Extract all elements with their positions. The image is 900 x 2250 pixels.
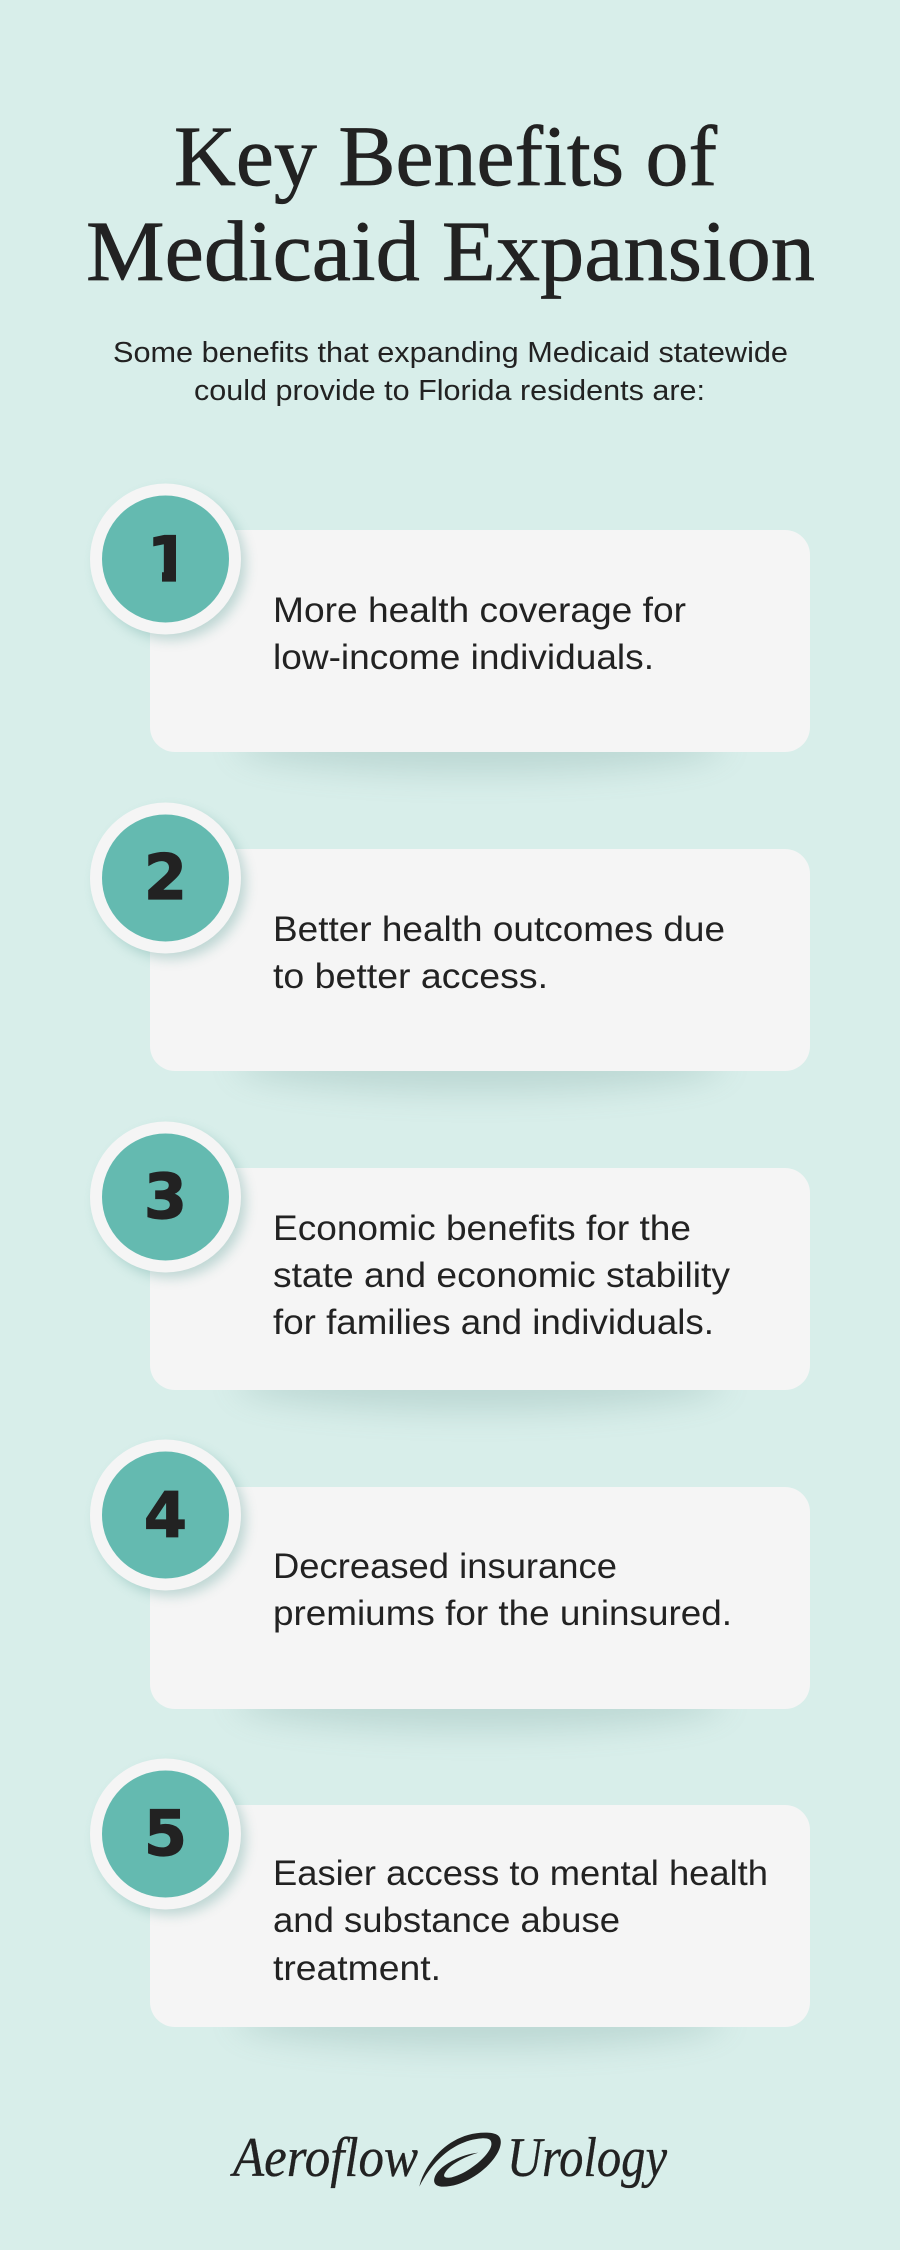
text: benefit 3: state and economic stability bbox=[273, 1255, 730, 1295]
text: benefit 2 bbox=[273, 909, 725, 996]
subtitle: could provide to Florida residents are: bbox=[194, 375, 705, 407]
text: benefit 4: Decreased insurance bbox=[273, 1546, 617, 1586]
text: benefit 5 bbox=[273, 1853, 768, 1988]
subtitle: Some benefits that expanding Medicaid statewide bbox=[113, 337, 788, 369]
panel: benefit 5 bbox=[90, 1758, 810, 2048]
title: Key Benefits of bbox=[174, 108, 717, 204]
text: benefit 2: Better health outcomes due bbox=[273, 909, 725, 949]
text: benefit 3: Economic benefits for the bbox=[273, 1208, 691, 1248]
title bbox=[86, 108, 815, 299]
text: benefit 3 bbox=[273, 1208, 730, 1342]
text: benefit 1 bbox=[273, 590, 686, 677]
panel: benefit 2 bbox=[90, 802, 810, 1092]
text: benefit 5: and substance abuse bbox=[273, 1900, 620, 1940]
number 3: 3 bbox=[144, 1160, 187, 1233]
subtitle bbox=[113, 337, 788, 407]
logo: Aeroflow Urology bbox=[229, 2127, 667, 2189]
text: benefit 5: treatment. bbox=[273, 1948, 441, 1988]
text: benefit 3: for families and individuals. bbox=[273, 1302, 714, 1342]
number 4: 4 bbox=[144, 1479, 187, 1552]
text: benefit 4: premiums for the uninsured. bbox=[273, 1593, 732, 1633]
logo: Aeroflow Urology: Urology bbox=[507, 2127, 667, 2189]
icon: swirl bbox=[419, 2133, 501, 2187]
number 2: 2 bbox=[144, 841, 187, 914]
panel: benefit 1 bbox=[90, 484, 810, 773]
text: benefit 5: Easier access to mental health bbox=[273, 1853, 768, 1893]
text: benefit 4 bbox=[273, 1546, 732, 1633]
text: benefit 1: More health coverage for bbox=[273, 590, 686, 630]
number 5: 5 bbox=[144, 1797, 187, 1870]
title: Medicaid Expansion bbox=[86, 203, 815, 299]
text: benefit 2: to better access. bbox=[273, 956, 548, 996]
panel: benefit 4 bbox=[90, 1440, 810, 1730]
logo: Aeroflow Urology: Aeroflow bbox=[229, 2127, 418, 2189]
number 1: 1 bbox=[147, 523, 190, 596]
panel: benefit 3 bbox=[90, 1122, 810, 1411]
text: benefit 1: low-income individuals. bbox=[273, 637, 654, 677]
